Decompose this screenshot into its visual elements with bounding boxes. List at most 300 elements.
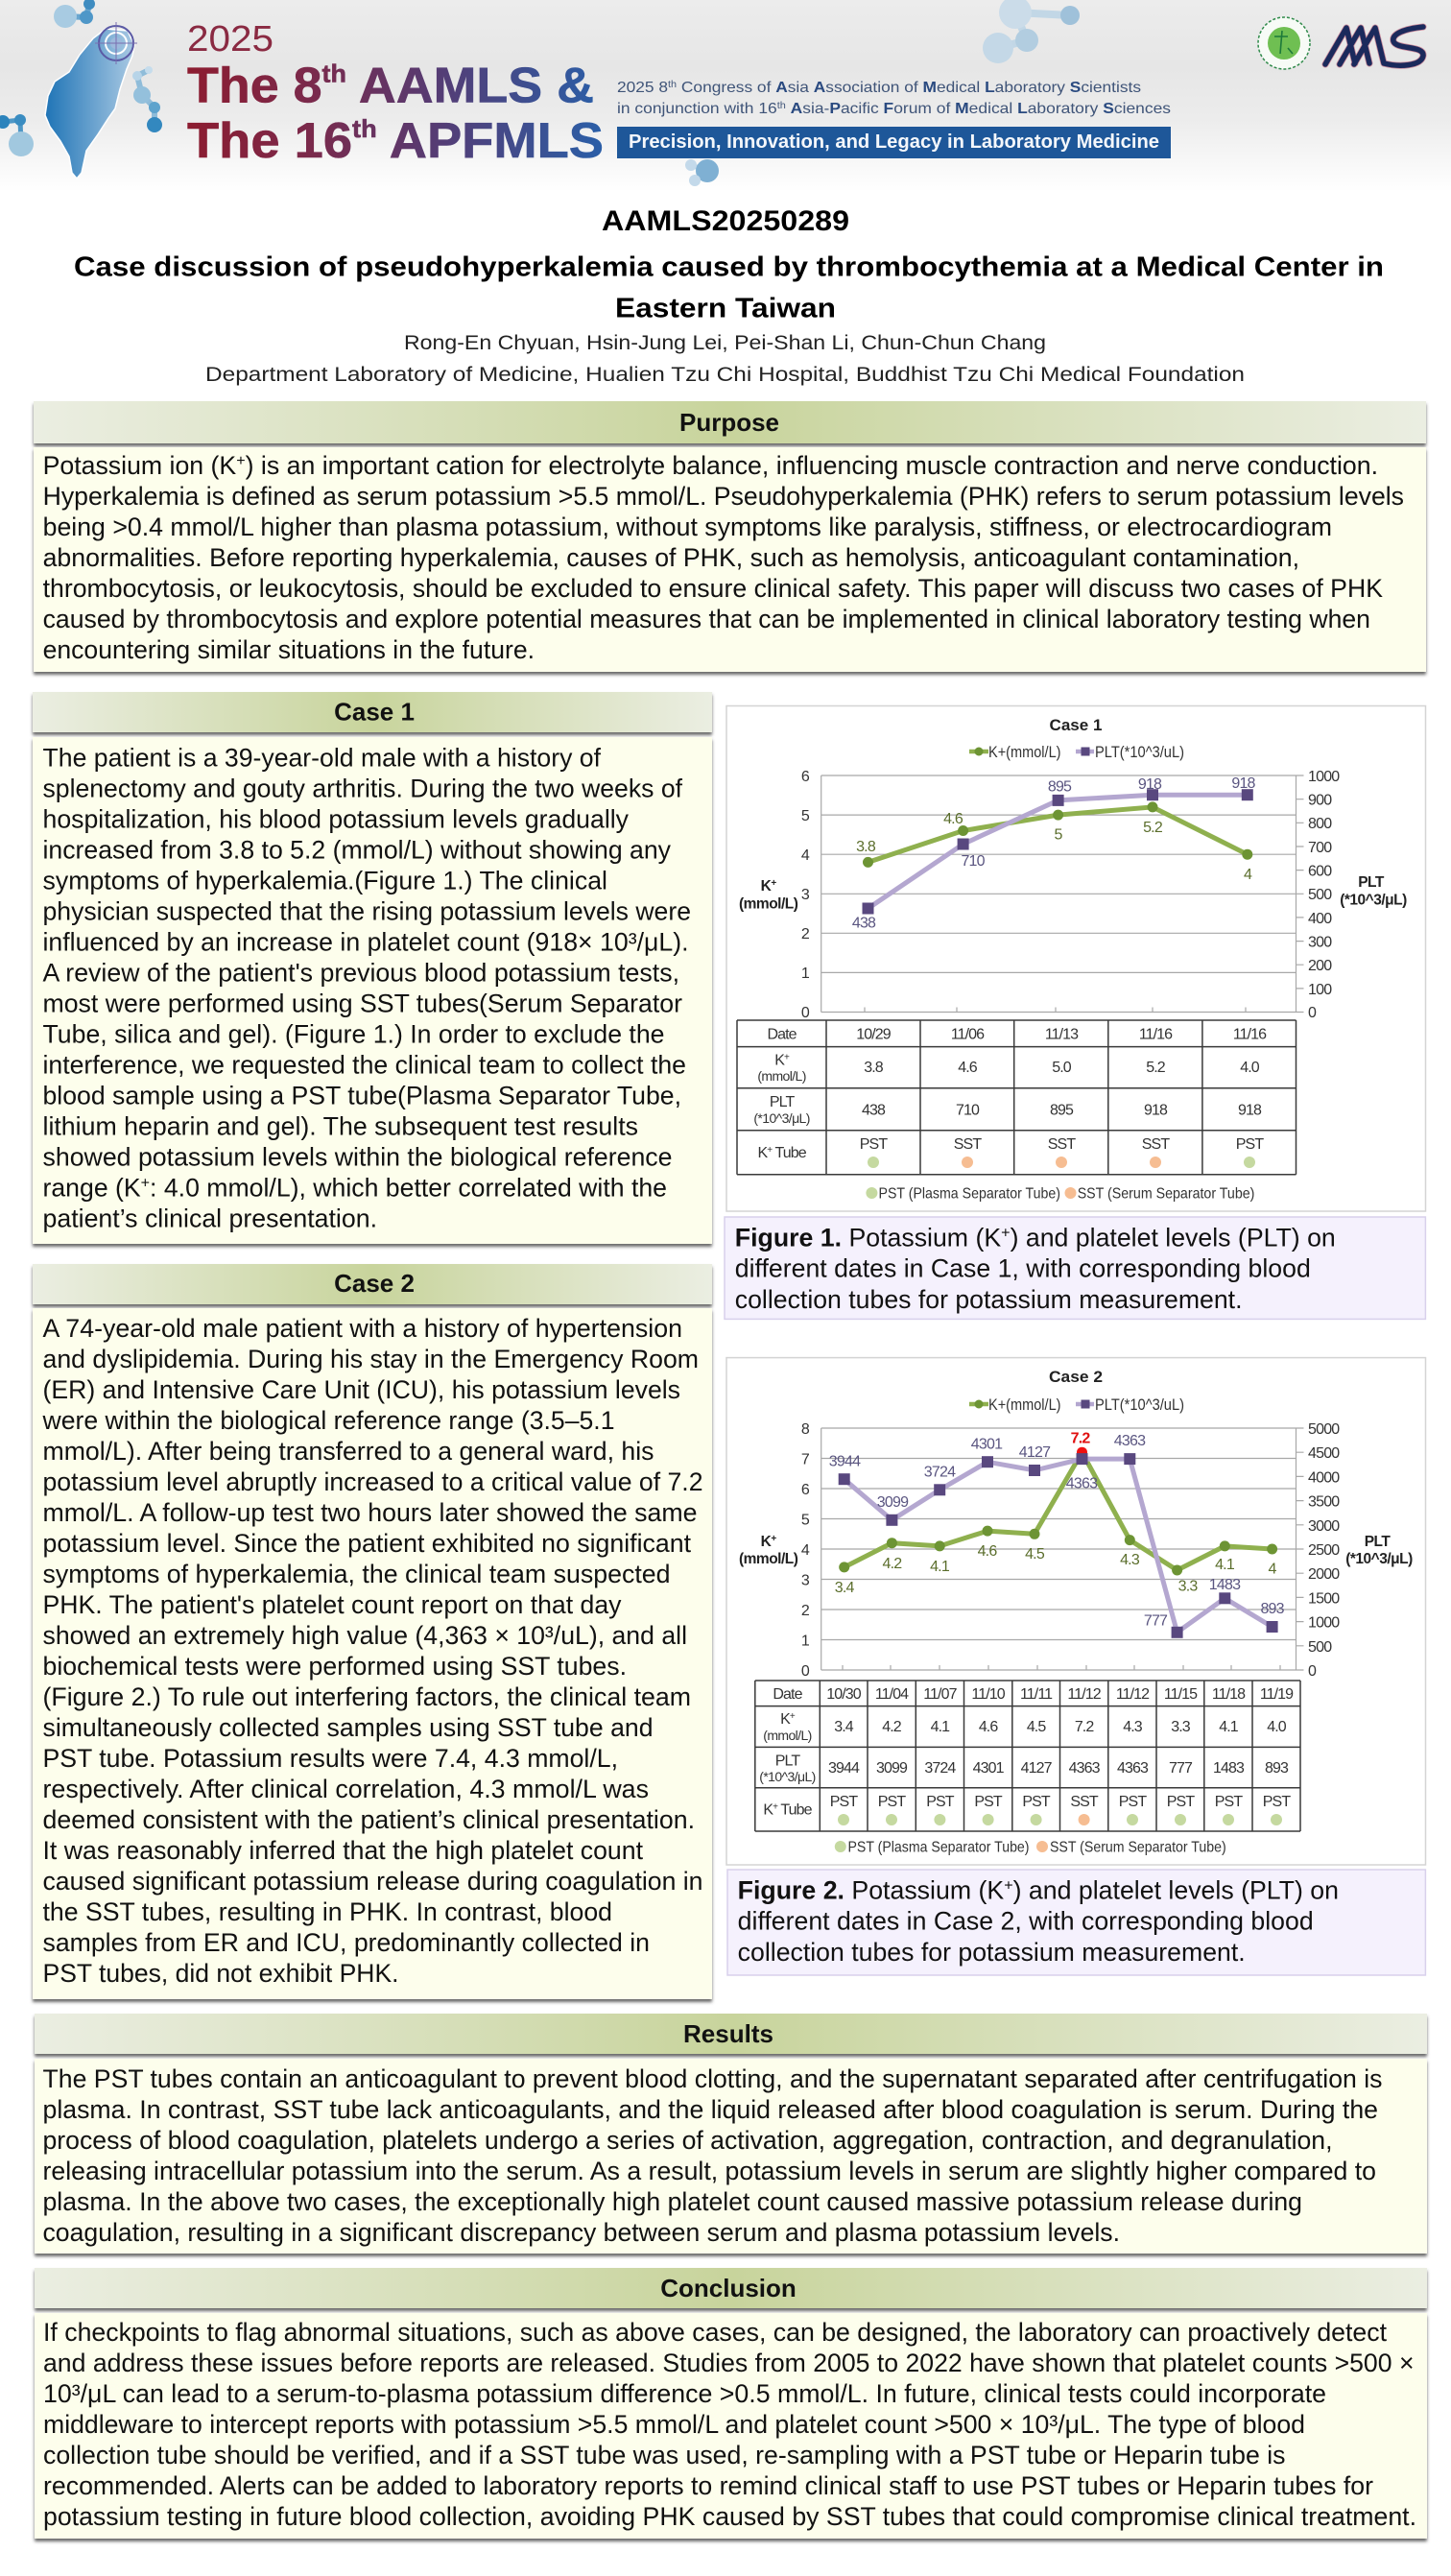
case 1 body: influenced by an increase in platelet count (918× 10³/μL). bbox=[42, 927, 689, 956]
table row: platelet: 4127 bbox=[1021, 1760, 1053, 1777]
table row: date: 11/11 bbox=[1020, 1686, 1053, 1703]
conclusion body: If checkpoints to flag abnormal situations, such as above cases, can be designed, the laboratory can proactively detect bbox=[43, 2318, 1388, 2347]
case 2 heading bbox=[33, 1264, 712, 1304]
case 1 body: interference, we requested the clinical team to collect the bbox=[42, 1050, 686, 1079]
left axis ticks: 4 bbox=[801, 847, 810, 864]
conclusion body: collection tube should be verified, and if a SST tube was used, re-sampling with a PST tube or Heparin tube is bbox=[43, 2441, 1286, 2469]
purpose body: abnormalities. Before reporting hyperkalemia, causes of PHK, such as hemolysis, anticoagulant contamination, bbox=[43, 543, 1299, 572]
platelet value labels: 3724 bbox=[924, 1465, 956, 1481]
left axis ticks: 8 bbox=[801, 1421, 810, 1438]
paper title line 2: Eastern Taiwan bbox=[615, 294, 836, 324]
potassium value labels: 3.3 bbox=[1178, 1579, 1198, 1595]
figure 1 tube legend: PST (Plasma Separator Tube) bbox=[879, 1186, 1060, 1203]
table row: potassium: 4.3 bbox=[1123, 1719, 1143, 1735]
potassium value labels: 7.2 bbox=[1071, 1430, 1090, 1446]
table row: tube type: + bbox=[767, 1145, 773, 1156]
left axis ticks: 5 bbox=[801, 1513, 810, 1528]
table row: platelet: 438 bbox=[862, 1102, 886, 1119]
heading: year: 2025 bbox=[187, 19, 274, 60]
table row: potassium: K bbox=[774, 1053, 784, 1069]
potassium value labels: 5.2 bbox=[1143, 820, 1163, 836]
affiliation: Department Laboratory of Medicine, Hualien Tzu Chi Hospital, Buddhist Tzu Chi Medical Foundation bbox=[205, 364, 1245, 386]
heading: 8th AAMLS: th bbox=[322, 60, 346, 88]
caption: figure 2: Figure 2. Potassium (K bbox=[738, 1875, 1003, 1904]
case 2 body: mmol/L. A follow-up test two hours later showed the same bbox=[42, 1498, 697, 1527]
conclusion body: 10³/μL can lead to a serum-to-plasma potassium difference >0.5 mmol/L. In future, clinical tests could incorporate bbox=[43, 2379, 1326, 2408]
table row: potassium: 4.5 bbox=[1027, 1719, 1046, 1735]
right axis ticks: 2500 bbox=[1308, 1542, 1340, 1559]
figure 1 data table bbox=[737, 1020, 1296, 1175]
caption: figure 1 bbox=[725, 1217, 1425, 1319]
case 1 body bbox=[33, 737, 712, 1244]
table row: tube type: PST bbox=[1263, 1794, 1291, 1810]
platelet value labels: 710 bbox=[961, 853, 986, 870]
figure 1 chart title: Case 1 bbox=[1050, 716, 1102, 734]
conclusion body bbox=[35, 2313, 1427, 2539]
right axis ticks: 4500 bbox=[1308, 1445, 1340, 1462]
left axis ticks: 0 bbox=[801, 1663, 810, 1680]
right axis ticks: 300 bbox=[1308, 935, 1332, 950]
platelet value labels: 438 bbox=[852, 916, 876, 931]
case 1 body: increased from 3.8 to 5.2 (mmol/L) without showing any bbox=[42, 835, 672, 864]
left axis ticks: 1 bbox=[801, 966, 810, 982]
authors: Rong-En Chyuan, Hsin-Jung Lei, Pei-Shan Li, Chun-Chun Chang bbox=[404, 332, 1046, 354]
case 2 body: potassium level abruptly increased to a critical value of 7.2 bbox=[42, 1467, 702, 1496]
case 2 body: caused significant potassium release during coagulation in bbox=[42, 1867, 702, 1896]
table row: potassium: + bbox=[790, 1711, 796, 1722]
potassium value labels: 4.2 bbox=[882, 1556, 902, 1572]
congress subtitle line 1: Congress of bbox=[677, 80, 775, 96]
table row: potassium: 3.3 bbox=[1171, 1719, 1191, 1735]
table row: tube type: PST bbox=[878, 1794, 906, 1810]
table row: platelet bbox=[759, 1753, 1289, 1784]
right axis title: PLT bbox=[1358, 874, 1385, 891]
slogan bar: Precision, Innovation, and Legacy in Laboratory Medicine bbox=[629, 131, 1159, 153]
case 2 body: It was reasonably inferred that the high platelet count bbox=[42, 1836, 644, 1865]
caption: figure 1: different dates in Case 1, with corresponding blood bbox=[735, 1253, 1311, 1282]
table row: date: 11/19 bbox=[1260, 1686, 1294, 1703]
purpose body: ) is an important cation for electrolyte balance, influencing muscle contraction and nerve conduction. bbox=[246, 451, 1378, 480]
right axis title: (*10^3/μL) bbox=[1345, 1551, 1413, 1567]
right axis ticks: 500 bbox=[1308, 887, 1332, 903]
tube markers bbox=[838, 1814, 1282, 1825]
table row: potassium: 5.2 bbox=[1146, 1060, 1166, 1076]
left axis ticks: 7 bbox=[801, 1451, 810, 1468]
figure 1 legend: K+(mmol/L) bbox=[988, 743, 1061, 761]
left axis title: + bbox=[771, 878, 776, 889]
logo: hospital seal bbox=[1258, 17, 1310, 69]
left axis ticks: 6 bbox=[801, 1482, 810, 1498]
table row: potassium: 4.6 bbox=[958, 1060, 978, 1076]
table row: potassium bbox=[763, 1711, 1287, 1743]
title block bbox=[74, 205, 1384, 386]
table row: platelet: 893 bbox=[1265, 1760, 1289, 1777]
table row: date: 11/16 bbox=[1233, 1027, 1267, 1042]
table row: date: 10/29 bbox=[856, 1027, 892, 1042]
table row: tube type: PST bbox=[1167, 1794, 1195, 1810]
icon: molecule beside map bbox=[132, 66, 162, 132]
platelet value labels: 895 bbox=[1048, 779, 1072, 796]
left axis ticks: 3 bbox=[801, 887, 810, 903]
table row: platelet: 3099 bbox=[876, 1760, 908, 1777]
caption: figure 2 bbox=[727, 1870, 1425, 1975]
platelet value labels: 893 bbox=[1260, 1601, 1285, 1617]
table row: tube type: PST bbox=[1215, 1794, 1243, 1810]
conclusion body: and address these issues before reports are released. Studies from 2005 to 2022 have shown that platelet counts >500 × bbox=[43, 2349, 1415, 2377]
conclusion heading bbox=[35, 2268, 1427, 2308]
table row: platelet: 1483 bbox=[1213, 1760, 1245, 1777]
potassium series bbox=[863, 801, 1252, 868]
table row: date: Date bbox=[767, 1027, 797, 1042]
panel: conclusion bbox=[35, 2268, 1427, 2539]
table row: tube type: PST bbox=[926, 1794, 955, 1810]
purpose body: being >0.4 mmol/L higher than plasma potassium, without symptoms like paralysis, stiffness, or electrocardiogram bbox=[43, 513, 1332, 541]
right axis title bbox=[1345, 1534, 1413, 1567]
table row: tube type bbox=[763, 1794, 1291, 1818]
icon: Taiwan map bbox=[45, 29, 134, 179]
potassium value labels: 4.5 bbox=[1025, 1546, 1045, 1562]
figure 2 legend: K+(mmol/L) bbox=[988, 1395, 1061, 1414]
case 1 body: : 4.0 mmol/L), which better correlated with the bbox=[150, 1173, 667, 1202]
table row: tube type bbox=[757, 1136, 1264, 1161]
case 2 body: biochemical tests were performed using SST tubes. bbox=[42, 1652, 627, 1681]
purpose body: thrombocytosis, or leukocytosis, should be excluded to ensure clinical safety. This paper will discuss two cases of PHK bbox=[43, 574, 1383, 603]
table row: tube type: PST bbox=[830, 1794, 858, 1810]
case 2 body: simultaneously collected samples using SST tube and bbox=[42, 1713, 653, 1742]
platelet value labels: 3944 bbox=[829, 1453, 861, 1469]
left axis ticks: 1 bbox=[801, 1634, 810, 1649]
conclusion body: potassium testing in future blood collection, avoiding PHK caused by SST tubes that could compromise clinical treatment. bbox=[43, 2502, 1416, 2531]
left axis ticks: 0 bbox=[801, 1005, 810, 1021]
case 2 body: deemed consistent with the patient’s clinical presentation. bbox=[42, 1805, 695, 1834]
case 2 body: (ER) and Intensive Care Unit (ICU), his potassium levels bbox=[42, 1375, 680, 1404]
purpose body: + bbox=[236, 453, 246, 469]
table row: tube type: PST bbox=[1236, 1136, 1264, 1153]
congress subtitle line 2: th bbox=[777, 101, 786, 111]
figure 2 frame bbox=[726, 1358, 1426, 1865]
table row: tube type: Tube bbox=[777, 1802, 813, 1818]
case 2 body: PHK. The patient's platelet count report on that day bbox=[42, 1590, 622, 1619]
potassium value labels: 4.6 bbox=[943, 811, 963, 827]
table row: date: 11/12 bbox=[1067, 1686, 1102, 1703]
right axis ticks: 200 bbox=[1308, 958, 1332, 974]
table row: platelet bbox=[753, 1094, 1262, 1126]
case 2 body: symptoms of hyperkalemia, the clinical team suspected bbox=[42, 1560, 670, 1588]
table row: platelet: (*10^3/μL) bbox=[753, 1110, 810, 1126]
platelet value labels: 777 bbox=[1144, 1612, 1168, 1629]
left axis title: K bbox=[761, 1534, 771, 1550]
logo: association mark bbox=[1325, 27, 1423, 65]
left axis title bbox=[739, 878, 798, 913]
panel: case 1 bbox=[33, 692, 712, 1244]
right axis ticks: 500 bbox=[1308, 1639, 1332, 1656]
results body: coagulation, resulting in a significant discrepancy between serum and plasma potassium levels. bbox=[42, 2218, 1120, 2247]
right axis title: (*10^3/μL) bbox=[1340, 893, 1407, 908]
potassium value labels: 4 bbox=[1269, 1561, 1277, 1578]
case 1 heading bbox=[33, 692, 712, 732]
results body: plasma. In contrast, SST tube lack anticoagulants, and the liquid released after blood coagulation is serum. During the bbox=[42, 2095, 1378, 2124]
platelet value labels: 918 bbox=[1231, 775, 1256, 792]
right axis title bbox=[1340, 874, 1407, 908]
table row: platelet: 918 bbox=[1238, 1102, 1262, 1119]
case 2 body: potassium level. Since the patient exhibited no significant bbox=[42, 1529, 692, 1558]
table row: date: Date bbox=[773, 1686, 803, 1703]
case 1 heading: Case 1 bbox=[334, 697, 415, 726]
platelet value labels: 4363 bbox=[1066, 1476, 1098, 1492]
left axis title: K bbox=[761, 878, 771, 894]
figure 1 legend: PLT(*10^3/uL) bbox=[1095, 743, 1184, 761]
table row: tube type: SST bbox=[1142, 1136, 1170, 1153]
table row: tube type: PST bbox=[974, 1794, 1003, 1810]
figure 1 legend bbox=[969, 743, 1184, 761]
table row: platelet: 4363 bbox=[1069, 1760, 1101, 1777]
results heading: Results bbox=[683, 2019, 773, 2048]
purpose heading: Purpose bbox=[679, 408, 779, 437]
platelet value labels: 1483 bbox=[1209, 1577, 1241, 1593]
caption: figure 1: + bbox=[1001, 1225, 1011, 1242]
left axis ticks: 3 bbox=[801, 1572, 810, 1589]
figure 2 tube legend bbox=[835, 1839, 1226, 1856]
potassium value labels: 4.1 bbox=[1215, 1557, 1235, 1573]
caption: figure 1: Figure 1. Potassium (K bbox=[735, 1223, 1000, 1252]
figure 1 frame bbox=[726, 706, 1426, 1211]
potassium value labels: 4.6 bbox=[978, 1543, 997, 1560]
right axis ticks bbox=[1308, 1421, 1340, 1680]
table row: platelet: 3944 bbox=[828, 1760, 860, 1777]
platelet value labels: 4301 bbox=[971, 1437, 1003, 1453]
results body: process of blood coagulation, platelets undergo a series of activation, aggregation, contraction, and degranulation, bbox=[42, 2126, 1332, 2155]
heading: 16th APFMLS: th bbox=[352, 114, 377, 143]
abstract number: AAMLS20250289 bbox=[602, 205, 849, 237]
table row: tube type: SST bbox=[954, 1136, 982, 1153]
table row: date: 11/07 bbox=[923, 1686, 958, 1703]
case 2 body: mmol/L). After being transferred to a general ward, his bbox=[42, 1437, 654, 1466]
figure 2 line chart bbox=[739, 1421, 1413, 1680]
potassium value labels: 5 bbox=[1055, 826, 1063, 843]
case 1 body: most were performed using SST tubes(Serum Separator bbox=[42, 989, 682, 1017]
table row: potassium: 4.0 bbox=[1267, 1719, 1287, 1735]
potassium series bbox=[839, 1447, 1277, 1576]
right axis ticks bbox=[1308, 769, 1340, 1021]
platelet series bbox=[862, 789, 1253, 914]
table row: platelet: 4363 bbox=[1117, 1760, 1149, 1777]
case 2 body: A 74-year-old male patient with a history of hypertension bbox=[42, 1314, 682, 1343]
platelet value labels: 3099 bbox=[877, 1494, 909, 1511]
potassium value labels: 4.3 bbox=[1120, 1552, 1140, 1568]
congress subtitle line 1: 2025 8 bbox=[617, 80, 664, 96]
case 1 body: A review of the patient's previous blood potassium tests, bbox=[42, 958, 679, 987]
right axis title: PLT bbox=[1365, 1534, 1391, 1550]
congress subtitle line 1: th bbox=[668, 80, 677, 90]
platelet value labels: 4363 bbox=[1114, 1433, 1146, 1449]
caption: figure 1: collection tubes for potassium measurement. bbox=[735, 1285, 1242, 1314]
right axis ticks: 600 bbox=[1308, 864, 1332, 879]
platelet value labels: 4127 bbox=[1019, 1444, 1051, 1461]
right axis ticks: 900 bbox=[1308, 793, 1332, 808]
congress subtitle line 2: in conjunction with 16 bbox=[617, 101, 764, 117]
panel: figure 2 bbox=[726, 1358, 1426, 1865]
purpose body: encountering similar situations in the future. bbox=[43, 635, 535, 664]
panel: figure 1 bbox=[726, 706, 1426, 1211]
table row: potassium: 3.8 bbox=[864, 1060, 884, 1076]
case 1 body: lithium heparin and gel). The subsequent test results bbox=[42, 1111, 638, 1140]
table row: platelet: 4301 bbox=[973, 1760, 1005, 1777]
potassium value labels: 4 bbox=[1244, 867, 1252, 883]
table row: tube type: SST bbox=[1070, 1794, 1099, 1810]
paper title line 1: Case discussion of pseudohyperkalemia caused by thrombocythemia at a Medical Center in bbox=[74, 251, 1384, 282]
table row: platelet: PLT bbox=[770, 1094, 795, 1110]
table row: platelet: 3724 bbox=[924, 1760, 956, 1777]
table row: date: 11/04 bbox=[875, 1686, 909, 1703]
table row: platelet: 710 bbox=[956, 1102, 980, 1119]
table row: potassium: 5.0 bbox=[1052, 1060, 1072, 1076]
table row: potassium: 4.2 bbox=[882, 1719, 902, 1735]
table row: potassium: (mmol/L) bbox=[763, 1728, 812, 1743]
heading: 8th AAMLS: The 8 bbox=[187, 59, 318, 114]
table row: tube type: + bbox=[773, 1802, 778, 1812]
figure 2 tube legend: PST (Plasma Separator Tube) bbox=[848, 1839, 1029, 1856]
purpose body: Hyperkalemia is defined as serum potassium >5.5 mmol/L. Pseudohyperkalemia (PHK) refers to serum potassium levels bbox=[43, 482, 1404, 511]
table row: date: 11/10 bbox=[971, 1686, 1006, 1703]
slogan bar bbox=[617, 127, 1171, 158]
case 1 body: splenectomy and gouty arthritis. During the two weeks of bbox=[42, 774, 683, 802]
left axis title: + bbox=[771, 1534, 776, 1544]
right axis ticks: 4000 bbox=[1308, 1469, 1340, 1486]
platelet value labels bbox=[829, 1433, 1285, 1629]
heading: 8th AAMLS: AAMLS & bbox=[346, 59, 594, 114]
purpose heading bbox=[34, 401, 1426, 443]
table row: platelet: 918 bbox=[1144, 1102, 1168, 1119]
case 1 body: + bbox=[141, 1175, 150, 1192]
icon: molecule top left bbox=[54, 0, 95, 28]
panel: purpose bbox=[34, 401, 1426, 672]
case 2 body: samples from ER and ICU, predominantly collected in bbox=[42, 1928, 650, 1957]
case 1 body: physician suspected that the rising potassium levels were bbox=[42, 896, 691, 925]
purpose body: caused by thrombocytosis and explore potential measures that can be implemented in clinical laboratory testing when bbox=[43, 605, 1370, 633]
banner background bbox=[0, 0, 1451, 192]
table row: potassium: 4.1 bbox=[931, 1719, 950, 1735]
results body: The PST tubes contain an anticoagulant to prevent blood clotting, and the supernatant separated after centrifugation is bbox=[42, 2064, 1382, 2093]
table row: platelet: PLT bbox=[775, 1753, 800, 1770]
case 2 body: PST tubes, did not exhibit PHK. bbox=[42, 1959, 399, 1988]
table row: tube type: PST bbox=[860, 1136, 888, 1153]
potassium value labels: 3.8 bbox=[856, 839, 876, 855]
table row: tube type: SST bbox=[1048, 1136, 1076, 1153]
left axis ticks: 2 bbox=[801, 926, 810, 942]
conclusion heading: Conclusion bbox=[660, 2274, 797, 2302]
case 2 body: showed an extremely high value (4,363 × 10³/uL), and all bbox=[42, 1621, 687, 1650]
right axis ticks: 1000 bbox=[1308, 1615, 1340, 1632]
table row: potassium: 4.0 bbox=[1240, 1060, 1260, 1076]
table row: potassium: K bbox=[780, 1711, 790, 1728]
right axis ticks: 700 bbox=[1308, 840, 1332, 856]
table row: potassium: 4.1 bbox=[1219, 1719, 1239, 1735]
figure 2 data table bbox=[755, 1681, 1300, 1831]
left axis title: (mmol/L) bbox=[739, 896, 798, 913]
icon: molecule top center bbox=[983, 0, 1080, 63]
results body: plasma. In the above two cases, the exceptionally high platelet count caused massive potassium release during bbox=[42, 2187, 1302, 2216]
table row: date: 11/16 bbox=[1139, 1027, 1173, 1042]
table row: tube type: PST bbox=[1022, 1794, 1051, 1810]
results body: releasing intracellular potassium into the serum. As a result, potassium levels in serum are slightly higher compared to bbox=[42, 2157, 1376, 2185]
right axis ticks: 800 bbox=[1308, 816, 1332, 832]
icon: molecule under slogan bbox=[685, 159, 719, 186]
heading: 16th APFMLS: APFMLS bbox=[377, 113, 604, 169]
table row: platelet: (*10^3/μL) bbox=[759, 1769, 816, 1784]
case 1 body: symptoms of hyperkalemia.(Figure 1.) The clinical bbox=[42, 866, 607, 894]
caption: figure 1: ) and platelet levels (PLT) on bbox=[1011, 1223, 1336, 1252]
congress subtitle line 1: Asia Association of Medical Laboratory Scientists bbox=[775, 80, 1136, 96]
table row: date: 11/06 bbox=[951, 1027, 985, 1042]
figure 2 tube legend: SST (Serum Separator Tube) bbox=[1050, 1839, 1226, 1856]
case 1 body: showed potassium levels within the biological reference bbox=[42, 1142, 672, 1171]
table row: date: 11/13 bbox=[1045, 1027, 1079, 1042]
potassium value labels bbox=[835, 1430, 1277, 1596]
figure 2 legend: PLT(*10^3/uL) bbox=[1095, 1395, 1184, 1414]
left axis ticks: 5 bbox=[801, 808, 810, 824]
case 2 body: and dyslipidemia. During his stay in the Emergency Room bbox=[42, 1345, 699, 1373]
left axis ticks bbox=[801, 1421, 810, 1680]
right axis ticks: 3500 bbox=[1308, 1494, 1340, 1511]
table row: date: 11/18 bbox=[1212, 1686, 1246, 1703]
table row: potassium: 4.6 bbox=[979, 1719, 998, 1735]
left axis ticks: 4 bbox=[801, 1542, 810, 1559]
right axis ticks: 1000 bbox=[1308, 769, 1340, 785]
results heading bbox=[35, 2014, 1427, 2054]
caption: figure 2: different dates in Case 2, with corresponding blood bbox=[738, 1906, 1314, 1935]
icon: location target bbox=[95, 22, 137, 64]
table row: tube type: Tube bbox=[772, 1145, 807, 1161]
table row: platelet: 777 bbox=[1169, 1760, 1193, 1777]
caption: figure 2: ) and platelet levels (PLT) on bbox=[1013, 1875, 1339, 1904]
potassium value labels: 4.1 bbox=[930, 1559, 950, 1575]
results body bbox=[35, 2059, 1427, 2254]
potassium value labels: 3.4 bbox=[835, 1580, 855, 1596]
case 2 heading: Case 2 bbox=[334, 1269, 415, 1298]
table row: potassium: 3.4 bbox=[834, 1719, 854, 1735]
right axis ticks: 100 bbox=[1308, 982, 1332, 998]
left axis ticks: 2 bbox=[801, 1603, 810, 1619]
right axis ticks: 3000 bbox=[1308, 1518, 1340, 1535]
conclusion body: middleware to intercept reports with potassium >5.5 mmol/L and platelet count >500 × 10³/μL. The type of blood bbox=[43, 2410, 1305, 2439]
caption: figure 2: collection tubes for potassium measurement. bbox=[738, 1938, 1246, 1967]
right axis ticks: 1500 bbox=[1308, 1590, 1340, 1607]
table row: date: 11/12 bbox=[1116, 1686, 1150, 1703]
figure 2 legend bbox=[969, 1395, 1184, 1414]
figure 1 line chart bbox=[739, 769, 1407, 1021]
table row: date bbox=[767, 1027, 1267, 1042]
left axis ticks bbox=[801, 769, 810, 1021]
table row: date: 10/30 bbox=[826, 1686, 862, 1703]
caption: figure 2: + bbox=[1004, 1877, 1013, 1895]
case 1 body: hospitalization, his blood potassium levels gradually bbox=[42, 804, 630, 833]
case 2 body: were within the biological reference range (3.5–5.1 bbox=[41, 1406, 615, 1435]
table row: date bbox=[773, 1686, 1294, 1703]
table row: tube type: K bbox=[757, 1145, 767, 1161]
table row: tube type: PST bbox=[1119, 1794, 1147, 1810]
right axis ticks: 400 bbox=[1308, 911, 1332, 927]
icon: molecule bottom left bbox=[0, 114, 34, 156]
case 1 body: patient’s clinical presentation. bbox=[42, 1204, 377, 1232]
panel: case 2 bbox=[33, 1264, 712, 1999]
figure 1 tube legend bbox=[866, 1186, 1254, 1203]
case 1 body: The patient is a 39-year-old male with a history of bbox=[42, 743, 602, 772]
congress subtitle line 2: Asia-Pacific Forum of Medical Laboratory Sciences bbox=[791, 101, 1166, 117]
right axis ticks: 2000 bbox=[1308, 1566, 1340, 1583]
case 2 body: (Figure 2.) To rule out interfering factors, the clinical team bbox=[42, 1682, 691, 1711]
table row: potassium: + bbox=[784, 1053, 790, 1063]
left axis title: (mmol/L) bbox=[739, 1551, 798, 1567]
